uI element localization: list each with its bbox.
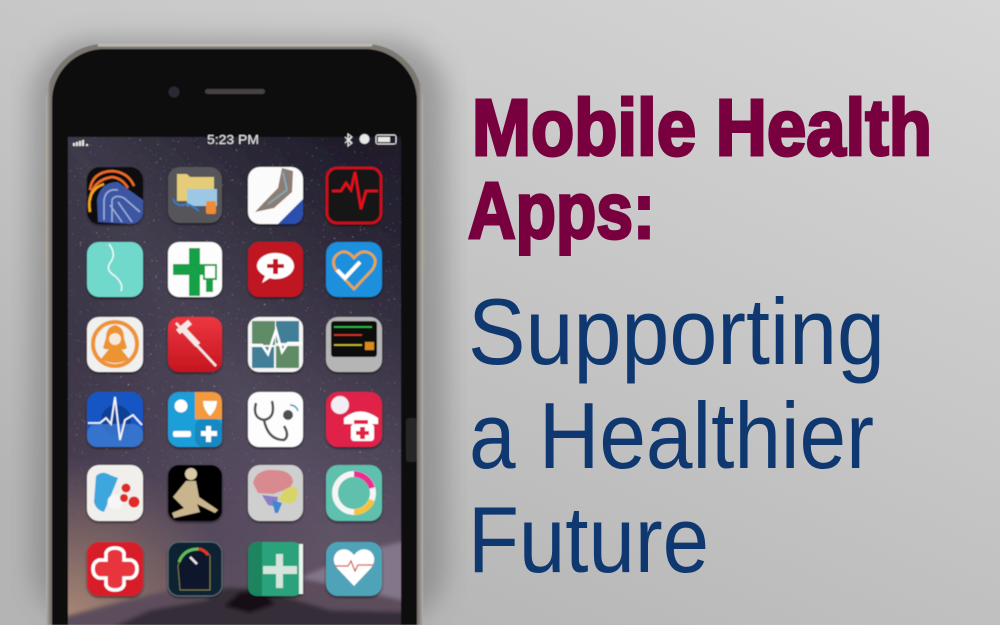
- icon: speech bubble cross: [248, 242, 303, 297]
- icon: pills: [87, 465, 143, 521]
- subtitle: Supporting: [468, 279, 885, 384]
- battery: [376, 135, 396, 144]
- icon: green cross: [168, 242, 222, 297]
- reflection: [406, 418, 417, 462]
- icon: red telephone: [326, 392, 382, 447]
- icon: brain: [248, 465, 303, 521]
- phone body: [46, 44, 423, 625]
- icon: orange portrait: [87, 317, 143, 372]
- icon: heart check: [326, 242, 382, 297]
- icon: red cross: [87, 542, 143, 596]
- front camera: [168, 86, 180, 98]
- icon: ring: [326, 465, 382, 521]
- subtitle: a Healthier: [469, 383, 874, 488]
- icon: foot: [248, 167, 303, 224]
- status bar: [73, 133, 396, 147]
- subtitle: Future: [468, 487, 709, 592]
- speaker: [205, 89, 265, 94]
- icon: skeleton: [168, 465, 222, 521]
- clock: 5:23 PM: [207, 133, 259, 147]
- icon: white heart: [326, 542, 382, 596]
- wallpaper: [60, 137, 410, 625]
- icon: patient monitor: [326, 317, 382, 372]
- alarm: [360, 134, 370, 144]
- icon: head gauge: [168, 542, 222, 596]
- top edge highlight: [98, 44, 372, 46]
- icon: four tile: [168, 392, 222, 447]
- icon: green blue pulse: [248, 317, 303, 372]
- icon: heart monitor: [327, 168, 381, 223]
- phone side buttons: [44, 142, 425, 268]
- icon: syringe: [168, 317, 222, 372]
- icon: green book: [248, 542, 303, 596]
- subtitle: [468, 279, 885, 592]
- title: Apps:: [468, 166, 655, 255]
- icon: fingerprint: [87, 167, 143, 224]
- signal: [73, 140, 88, 146]
- phone shadow: [32, 40, 446, 625]
- icon: stethoscope: [248, 392, 303, 447]
- phone bezel: [52, 49, 417, 625]
- app icons: [87, 167, 382, 596]
- title: [468, 83, 932, 255]
- phone: [32, 40, 446, 625]
- icon: teal curve: [87, 242, 143, 297]
- bluetooth: [345, 134, 352, 146]
- title: Mobile Health: [472, 83, 932, 172]
- icon: blue ecg: [87, 392, 143, 447]
- icon: folder: [168, 167, 222, 223]
